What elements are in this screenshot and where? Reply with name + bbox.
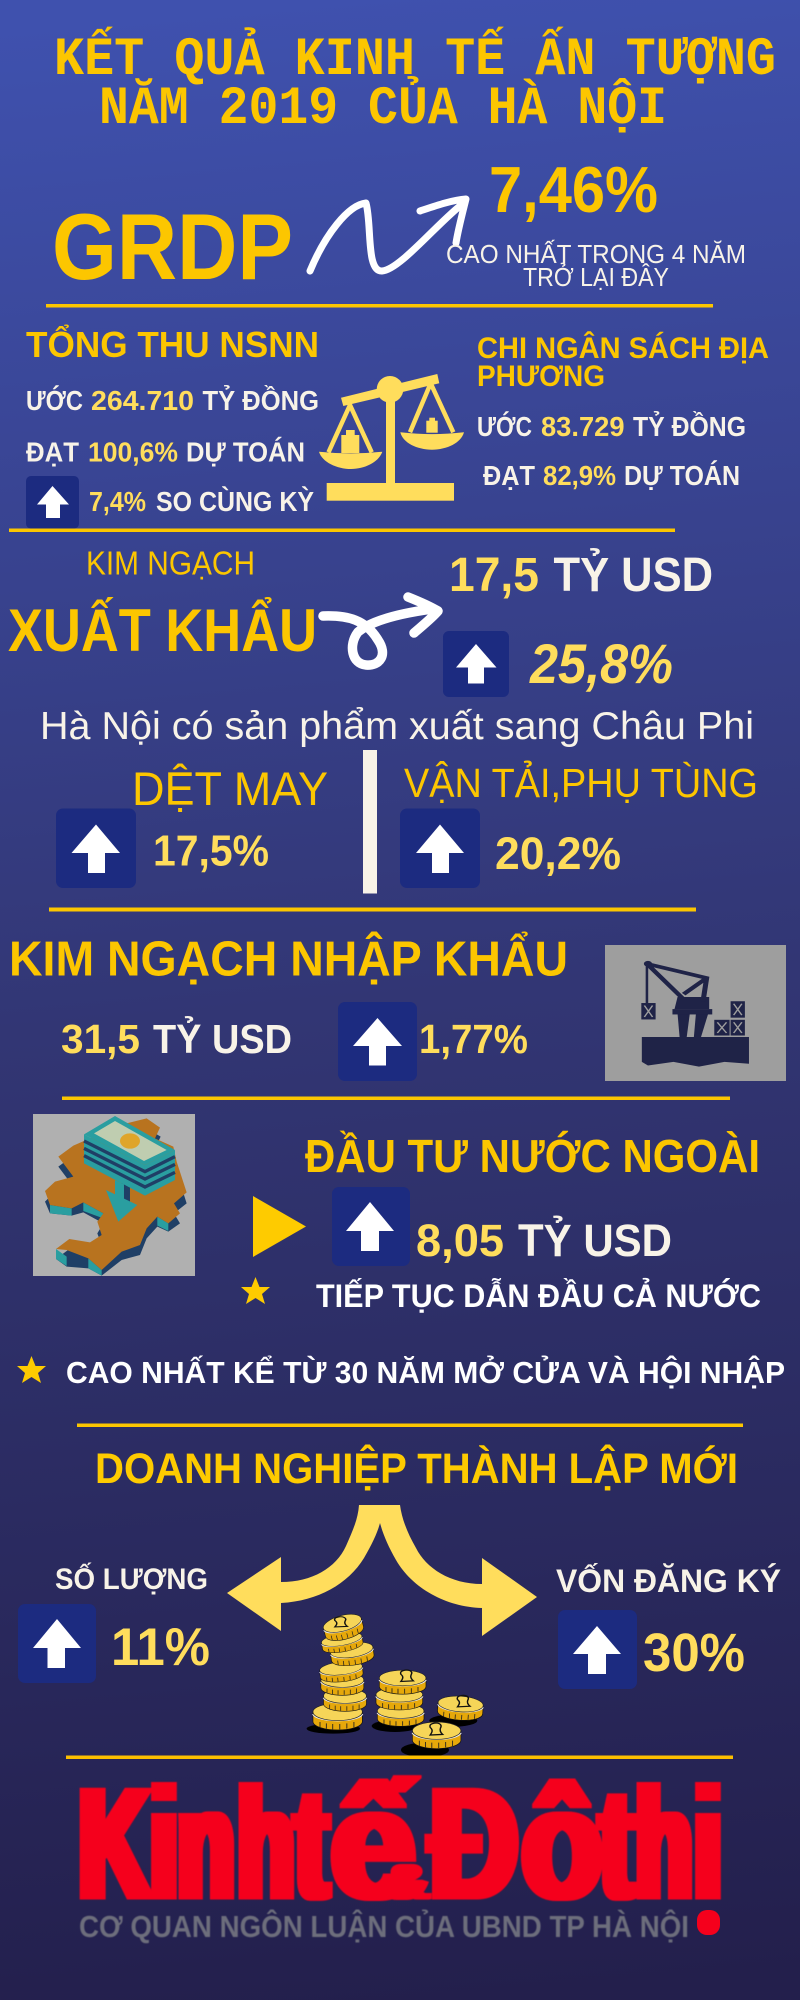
panel: imports: [9, 932, 786, 1081]
FDI value: [416, 1215, 672, 1266]
icon: up arrow box: [338, 1002, 417, 1081]
count growth: 11%: [111, 1618, 210, 1677]
GRDP growth figure: 7,46%: [489, 153, 658, 226]
export value: TỶ USD: [554, 547, 713, 602]
revenue estimate: [26, 384, 319, 416]
logo: Kinh tế & Đô thị: &: [386, 1854, 428, 1910]
capital growth: 30%: [643, 1623, 745, 1683]
icon: coins: [307, 1611, 484, 1757]
label: kim ngạch: KIM NGẠCH: [86, 545, 255, 582]
revenue vs plan: [26, 436, 305, 468]
text: highest in 30 years: CAO NHẤT KỂ TỪ 30 NĂM MỞ CỬA VÀ HỘI NHẬP: [66, 1354, 785, 1390]
revenue estimate: TỶ ĐỒNG: [202, 384, 319, 416]
logo: Kinh tế & Đô thị: K: [79, 1756, 150, 1932]
logo tagline: CƠ QUAN NGÔN LUẬN CỦA UBND TP HÀ NỘI: [79, 1908, 689, 1944]
heading: xuất khẩu: XUẤT KHẨU: [8, 597, 317, 664]
panel: textile exports: [56, 762, 328, 888]
textile growth: 17,5%: [153, 827, 269, 876]
icon: port crane and ship: [605, 945, 786, 1081]
revenue vs plan: DỰ TOÁN: [186, 436, 305, 468]
icon: up arrow box: [26, 476, 79, 529]
import growth: 1,77%: [419, 1016, 528, 1062]
icon: star: [241, 1277, 270, 1304]
import value: [61, 1016, 292, 1062]
spending vs plan: [483, 460, 740, 491]
logo: Kinh tế & Đô thị: t: [295, 1756, 328, 1932]
revenue estimate: 264.710: [91, 385, 194, 416]
icon: up arrow box: [332, 1187, 410, 1266]
logo: Kinh tế & Đô thị: ế: [331, 1756, 416, 1932]
panel: GRDP: [52, 153, 746, 299]
label: vốn đăng ký: VỐN ĐĂNG KÝ: [556, 1563, 781, 1599]
revenue vs plan: ĐẠT: [26, 436, 79, 468]
title: NĂM 2019 CỦA HÀ NỘI: [99, 76, 667, 140]
spending estimate: 83.729: [541, 411, 624, 442]
revenue vs plan: 100,6%: [88, 436, 178, 468]
FDI value: 8,05: [416, 1215, 504, 1266]
icon: balance scale: [319, 374, 464, 501]
panel: budget revenue: [26, 322, 319, 529]
title: [54, 27, 776, 140]
heading: chi ngân sách địa phương: CHI NGÂN SÁCH ĐỊA: [477, 331, 769, 365]
import value: TỶ USD: [153, 1016, 292, 1062]
heading: tổng thu NSNN: TỔNG THU NSNN: [26, 322, 319, 365]
spending estimate: ƯỚC: [477, 411, 532, 442]
heading: kim ngạch nhập khẩu: KIM NGẠCH NHẬP KHẨU: [9, 932, 568, 987]
heading: đầu tư nước ngoài: ĐẦU TƯ NƯỚC NGOÀI: [305, 1130, 760, 1182]
icon: yellow triangle: [253, 1196, 306, 1257]
label: dệt may: DỆT MAY: [132, 762, 328, 815]
GRDP caption: CAO NHẤT TRONG 4 NĂM: [446, 239, 746, 269]
label: vận tải, phụ tùng: VẬN TẢI,PHỤ TÙNG: [404, 760, 758, 806]
spending vs plan: DỰ TOÁN: [624, 460, 740, 491]
arrow: white squiggle up: [310, 199, 466, 271]
logo: Kinh tế & Đô thị: n: [178, 1756, 234, 1932]
logo: Kinh tế & Đô thị: i: [150, 1756, 178, 1932]
icon: investment map: [33, 1114, 195, 1276]
logo: Kinh tế & Đô thị: h: [636, 1756, 692, 1932]
FDI value: TỶ USD: [518, 1215, 672, 1266]
logo: Kinh tế & Đô thị: ô: [522, 1756, 602, 1932]
revenue growth: [89, 486, 314, 517]
icon: up arrow box: [443, 631, 509, 697]
panel: exports: [8, 545, 754, 748]
logo: Kinh tế & Đô thị: i: [694, 1756, 722, 1932]
panel: transport parts exports: [400, 760, 758, 888]
heading: chi ngân sách địa phương: [477, 331, 769, 393]
text: exports to Africa: Hà Nội có sản phẩm xuất sang Châu Phi: [40, 705, 754, 748]
GRDP caption: [446, 239, 746, 292]
heading: GRDP: GRDP: [52, 194, 293, 299]
GRDP caption: TRỞ LẠI ĐÂY: [523, 261, 669, 292]
arrow: white loop: [323, 597, 438, 665]
revenue growth: 7,4%: [89, 486, 146, 517]
export growth: 25,8%: [529, 632, 673, 695]
panel: foreign investment: [17, 1114, 785, 1390]
logo: Kinh tế & Đô thị: t: [600, 1756, 633, 1932]
label: số lượng: SỐ LƯỢNG: [55, 1562, 208, 1596]
icon: up arrow box: [56, 808, 136, 888]
icon: star: [17, 1356, 46, 1383]
logo: Kinh tế & Đô thị: [79, 1756, 722, 1944]
revenue estimate: ƯỚC: [26, 385, 83, 416]
export value: 17,5: [449, 549, 539, 602]
import value: 31,5: [61, 1016, 140, 1062]
logo red dot: [697, 1910, 720, 1935]
spending vs plan: ĐẠT: [483, 460, 535, 491]
logo: Kinh tế & Đô thị: Đ: [430, 1756, 518, 1932]
spending estimate: TỶ ĐỒNG: [633, 410, 746, 442]
transport growth: 20,2%: [495, 828, 621, 879]
export value: [449, 547, 713, 602]
logo: Kinh tế & Đô thị: h: [238, 1756, 294, 1932]
icon: up arrow box: [18, 1604, 96, 1683]
heading: chi ngân sách địa phương: PHƯƠNG: [477, 360, 605, 393]
arrow: split left and right: [227, 1505, 537, 1636]
divider: vertical bar: [363, 750, 377, 894]
spending estimate: [477, 410, 746, 442]
text: leading the country: TIẾP TỤC DẪN ĐẦU CẢ NƯỚC: [316, 1278, 761, 1314]
panel: local budget spending: [477, 331, 769, 491]
icon: up arrow box: [400, 808, 480, 888]
spending vs plan: 82,9%: [543, 460, 616, 491]
revenue growth: SO CÙNG KỲ: [156, 486, 314, 517]
panel: new enterprises: [18, 1444, 781, 1757]
heading: doanh nghiệp thành lập mới: DOANH NGHIỆP THÀNH LẬP MỚI: [95, 1444, 738, 1493]
icon: up arrow box: [558, 1610, 637, 1689]
